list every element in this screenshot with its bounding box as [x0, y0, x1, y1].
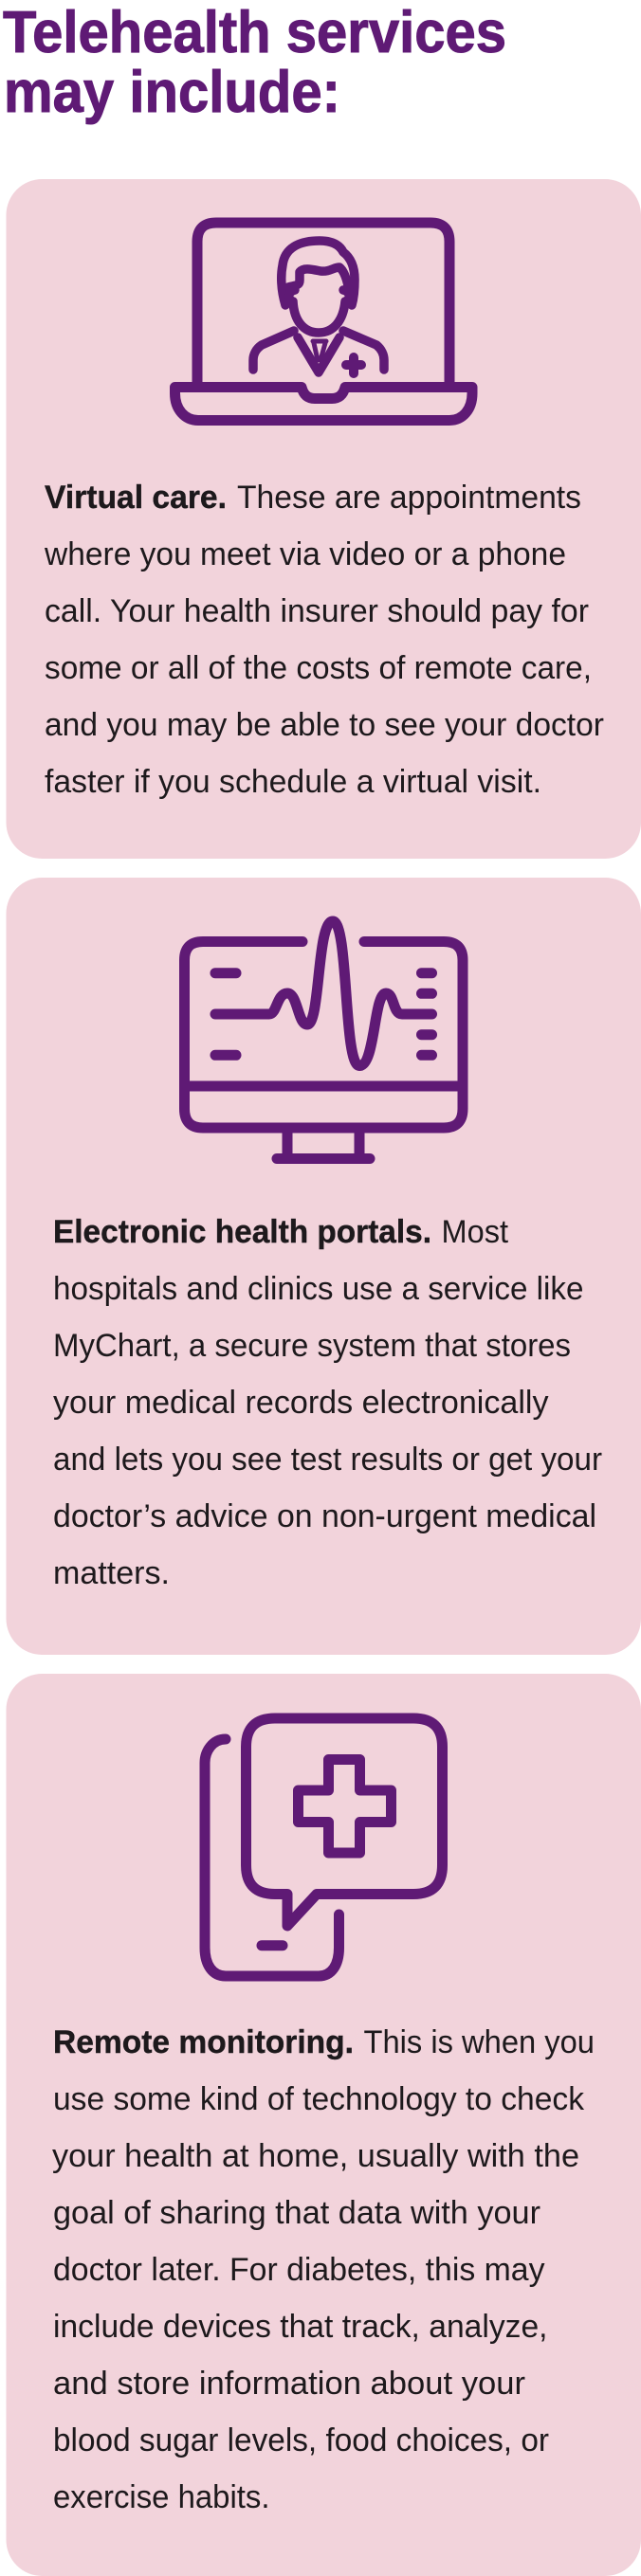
title: Telehealth services	[3, 0, 506, 65]
icon: phone with medical chat bubble	[205, 1718, 442, 1976]
text: electronic health portals: and lets you see test results or get your	[53, 1442, 602, 1478]
text: remote monitoring: This is when you	[364, 2024, 595, 2060]
text: electronic health portals: your medical records electronically	[53, 1385, 548, 1421]
text: electronic health portals: Electronic health portals.	[53, 1214, 431, 1250]
text: virtual care: These are appointments	[237, 480, 581, 516]
text: electronic health portals: MyChart, a secure system that stores	[53, 1328, 571, 1364]
text: remote monitoring: blood sugar levels, food choices, or	[53, 2422, 549, 2458]
text: remote monitoring	[52, 2024, 595, 2515]
text: electronic health portals: hospitals and clinics use a service like	[53, 1271, 584, 1307]
text: virtual care: some or all of the costs of remote care,	[45, 650, 592, 686]
icon: heart-rate monitor	[184, 921, 463, 1158]
text: remote monitoring: and store information about your	[53, 2366, 525, 2402]
text: virtual care: call. Your health insurer should pay for	[45, 593, 589, 629]
title: may include:	[4, 60, 340, 125]
icon: doctor on laptop	[174, 223, 472, 421]
text: remote monitoring: exercise habits.	[53, 2479, 269, 2515]
text: electronic health portals	[53, 1214, 602, 1591]
text: virtual care: faster if you schedule a virtual visit.	[45, 764, 541, 800]
title	[3, 0, 506, 125]
text: virtual care: Virtual care.	[45, 480, 227, 516]
text: remote monitoring: Remote monitoring.	[53, 2024, 354, 2060]
panel: virtual care	[6, 179, 641, 859]
text: remote monitoring: goal of sharing that data with your	[53, 2195, 540, 2231]
text: virtual care: where you meet via video or a phone	[44, 536, 566, 572]
panel: electronic health portals	[6, 878, 641, 1655]
text: electronic health portals: Most	[442, 1214, 509, 1250]
text: remote monitoring: doctor later. For diabetes, this may	[53, 2252, 544, 2288]
text: electronic health portals: matters.	[53, 1555, 170, 1591]
text: electronic health portals: doctor’s advice on non-urgent medical	[53, 1498, 596, 1534]
panel: remote monitoring	[6, 1674, 641, 2576]
text: virtual care: and you may be able to see your doctor	[45, 707, 604, 743]
text: remote monitoring: use some kind of technology to check	[53, 2081, 585, 2117]
text: virtual care	[44, 480, 604, 800]
text: remote monitoring: include devices that track, analyze,	[53, 2309, 548, 2345]
text: remote monitoring: your health at home, usually with the	[52, 2138, 579, 2174]
